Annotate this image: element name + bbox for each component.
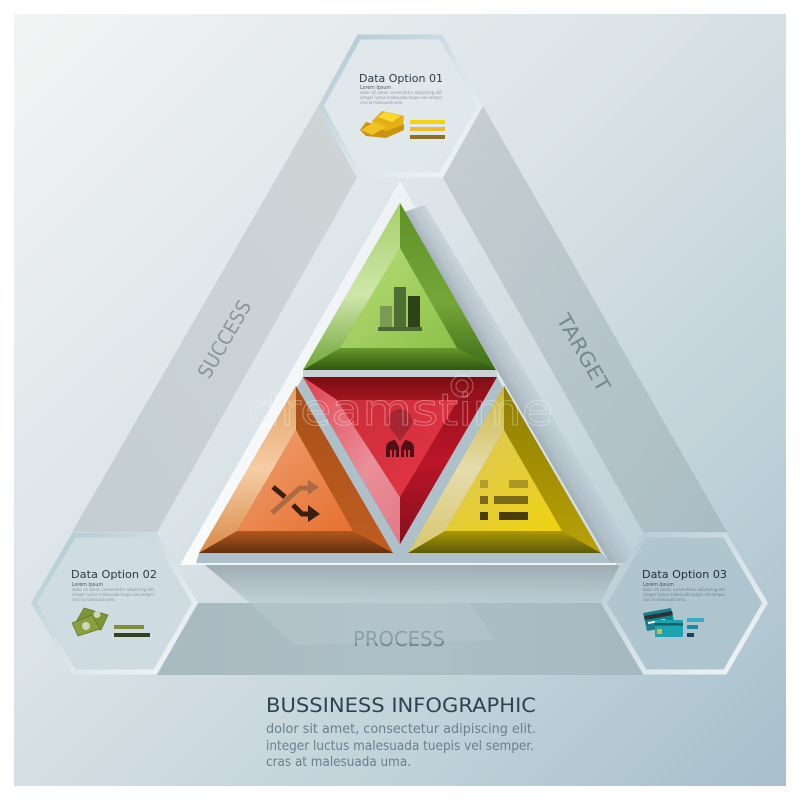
rim bottom highlight <box>196 563 616 565</box>
hexagon: data option 02: cras at malesuada uma. <box>72 597 115 602</box>
icon: gold bars <box>360 111 404 138</box>
band: target: TARGET <box>551 309 616 397</box>
central triangle gaps <box>196 377 612 563</box>
hexagon: data option 03: dolor sit amet, consectetur adipiscing elit. <box>643 587 726 592</box>
icon: credit cards <box>643 608 683 637</box>
hexagon: data option 02: dolor sit amet, consectetur adipiscing elit. <box>72 587 155 592</box>
watermark: dreamstime <box>248 385 553 436</box>
central triangle rim <box>180 181 622 565</box>
hexagon: data option 01: Data Option 01 <box>359 73 443 85</box>
divider between green and red <box>303 370 497 377</box>
hexagon: data option 03: integer luctus malesuada tuepis vel semper. <box>643 592 726 597</box>
band: process: PROCESS <box>353 627 445 651</box>
band: target <box>443 106 727 532</box>
triangle: yellow <box>408 386 601 553</box>
hexagon: data option 01: dolor sit amet, consectetur adipiscing elit. <box>360 90 443 95</box>
hexagon: data option 03 <box>604 535 765 672</box>
hexagon: data option 01 <box>321 37 480 175</box>
icon: shuffle arrows <box>272 480 320 522</box>
hexagon: data option 02: Lorem Ipsum <box>72 582 103 588</box>
title: BUSSINESS INFOGRAPHIC <box>266 694 536 717</box>
body text <box>266 721 536 770</box>
hexagon: data option 03: Lorem Ipsum <box>643 582 674 588</box>
band: success <box>72 106 357 532</box>
triangle: orange <box>199 386 393 553</box>
icon: businessman <box>386 409 414 457</box>
bars: card legend <box>687 618 704 637</box>
bars: gold legend <box>410 120 445 139</box>
hexagon: data option 02 <box>34 535 195 672</box>
triangle: red <box>303 377 497 544</box>
long shadow of central triangle <box>205 565 620 645</box>
hexagon: data option 01: integer luctus malesuada tuepis vel semper. <box>360 95 443 100</box>
hexagon: data option 02: Data Option 02 <box>71 569 157 581</box>
triangle: green <box>303 203 496 370</box>
hexagon: data option 02: integer luctus malesuada tuepis vel semper. <box>72 592 155 597</box>
band: process <box>157 603 643 675</box>
icon: bar chart <box>378 287 422 331</box>
hexagon: data option 01: Lorem Ipsum <box>360 85 391 91</box>
body text: integer luctus malesuada tuepis vel semper. <box>266 738 534 754</box>
hexagon: data option 03: cras at malesuada uma. <box>643 597 686 602</box>
hexagon: data option 01: cras at malesuada uma. <box>360 100 403 105</box>
body text: dolor sit amet, consectetur adipiscing elit. <box>266 721 536 737</box>
icon: banknotes <box>72 608 108 636</box>
bars: money legend <box>114 625 150 637</box>
icon: list <box>480 480 528 520</box>
body text: cras at malesuada uma. <box>266 754 411 770</box>
right side shadow <box>404 205 640 563</box>
hexagon: data option 03: Data Option 03 <box>642 569 727 581</box>
band: success: SUCCESS <box>193 296 256 382</box>
